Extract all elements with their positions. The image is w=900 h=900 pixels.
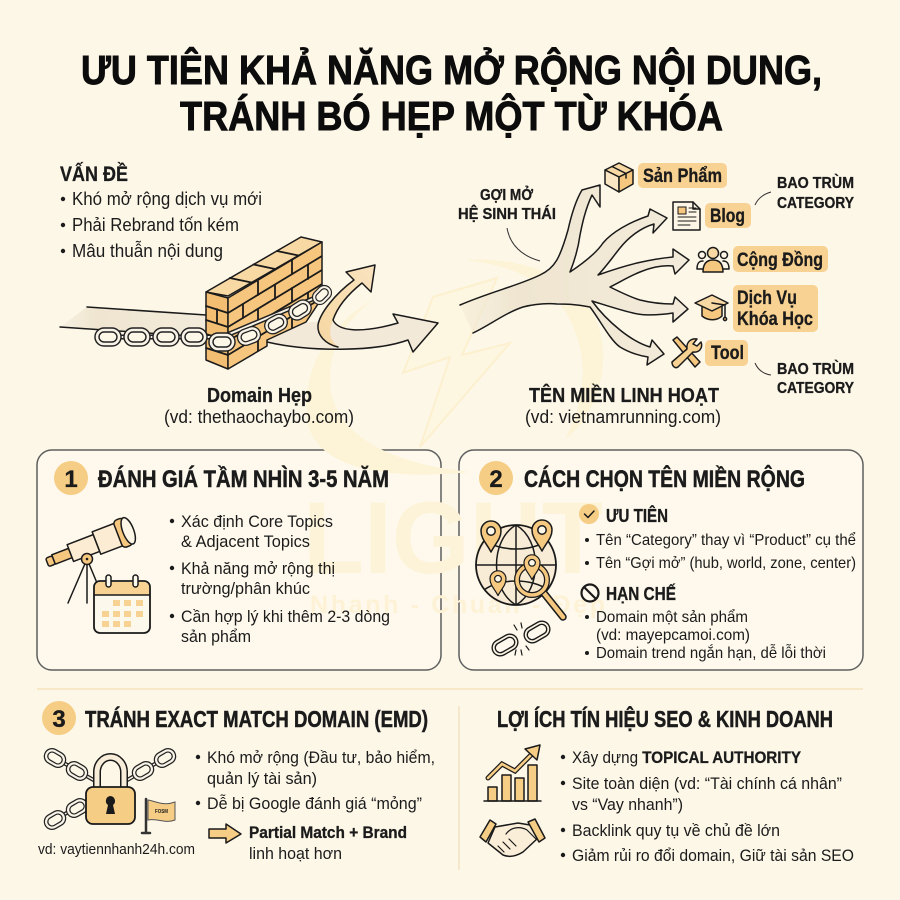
- bullet list: [170, 512, 390, 646]
- swoosh arrow up: [318, 265, 375, 347]
- chain: [97, 285, 332, 349]
- callout: gợi mở hệ sinh thái: GỢI MỞ: [480, 185, 533, 204]
- callout: bao trùm category bottom: BAO TRÙM: [777, 359, 854, 378]
- bullet list: Khả năng mở rộng thị: [181, 559, 335, 578]
- text block: vấn đề: Mâu thuẫn nội dung: [72, 240, 223, 261]
- section: hạn chế: Domain trend ngắn hạn, dễ lỗi thời: [596, 643, 826, 662]
- section: hạn chế: HẠN CHẾ: [606, 583, 676, 604]
- number badge 3: 3: [52, 706, 66, 733]
- bullet list: quản lý tài sản): [207, 769, 317, 788]
- label: tên miền linh hoạt: (vd: vietnamrunning.com): [525, 407, 721, 427]
- heading: cách chọn tên miền rộng: CÁCH CHỌN TÊN MIỀN RỘNG: [524, 465, 805, 493]
- label: dịch vụ khóa học: Dịch Vụ: [737, 288, 797, 309]
- text block: vấn đề: VẤN ĐỀ: [60, 163, 128, 186]
- title: TRÁNH BÓ HẸP MỘT TỪ KHÓA: [180, 93, 723, 139]
- diagram: narrow domain blocked by wall: [60, 237, 438, 369]
- number badge 2: [479, 461, 513, 495]
- label: cộng đồng: Cộng Đồng: [737, 250, 823, 271]
- callout: bao trùm category top: CATEGORY: [777, 195, 854, 212]
- label: domain hẹp: (vd: thethaochaybo.com): [164, 407, 354, 427]
- panel: step 2 frame: [459, 450, 863, 670]
- section: ưu tiên: Tên “Category” thay vì “Product” cụ thể: [596, 531, 856, 549]
- label: dịch vụ khóa học: [733, 285, 818, 332]
- label: tool: [705, 340, 748, 366]
- section: hạn chế: Domain một sản phẩm: [596, 608, 748, 626]
- icon: broken chain: [491, 620, 551, 657]
- icon: chained padlock: [44, 748, 176, 830]
- icon: calendar: [94, 575, 150, 633]
- bullet list: vs “Vay nhanh”): [572, 795, 683, 814]
- bullet list: Backlink quy tụ về chủ đề lớn: [572, 821, 780, 840]
- panel 2 content: [476, 461, 856, 662]
- bullet list: [196, 748, 435, 813]
- section: ưu tiên: [579, 504, 856, 572]
- bullet list: [561, 748, 854, 865]
- number badge 3: [42, 701, 76, 735]
- callout: gợi mở hệ sinh thái: HỆ SINH THÁI: [458, 204, 556, 223]
- watermark logo: LIGHT: [303, 481, 603, 595]
- number badge 1: [54, 461, 88, 495]
- label: domain hẹp: Domain Hẹp: [207, 385, 312, 407]
- label: tên miền linh hoạt: [525, 383, 721, 427]
- icon: globe with pins and magnifier: [476, 520, 563, 617]
- icon: flag: [142, 799, 175, 833]
- title: [81, 47, 822, 139]
- bullet list: Dễ bị Google đánh giá “mỏng”: [207, 794, 422, 813]
- text block: vấn đề: Phải Rebrand tốn kém: [72, 215, 239, 235]
- callout: bao trùm category top: [755, 173, 854, 212]
- bullet list: trường/phân khúc: [181, 579, 310, 598]
- icon: community: [697, 248, 729, 272]
- label: sản phẩm: Sản Phẩm: [643, 166, 722, 187]
- bullet list: Xác định Core Topics: [181, 512, 333, 531]
- brick wall: [206, 237, 322, 369]
- callout: gợi mở hệ sinh thái: [458, 185, 556, 261]
- bullet list: Xây dựng TOPICAL AUTHORITY: [572, 748, 802, 767]
- recommendation text: [249, 823, 407, 863]
- callout: bao trùm category top: BAO TRÙM: [777, 173, 854, 192]
- bullet list: sản phẩm: [181, 627, 251, 646]
- icon: telescope: [42, 515, 139, 603]
- arrow: to partial match: [209, 824, 241, 843]
- heading: tránh emd: TRÁNH EXACT MATCH DOMAIN (EMD): [85, 705, 428, 732]
- panel: step 1 frame: [37, 450, 441, 670]
- caption: example domain: vd: vaytiennhanh24h.com: [38, 841, 195, 858]
- callout: bao trùm category bottom: CATEGORY: [777, 380, 854, 397]
- bullet list: & Adjacent Topics: [181, 532, 310, 551]
- section: ưu tiên: ƯU TIÊN: [606, 505, 668, 526]
- section 3: avoid exact match domain: [38, 701, 435, 863]
- heading: đánh giá tầm nhìn: ĐÁNH GIÁ TẦM NHÌN 3-5 NĂM: [98, 465, 389, 493]
- icon: graduation cap: [695, 295, 728, 321]
- panel 1 content: [42, 461, 390, 646]
- diagram: branching flexible domain: [460, 185, 689, 365]
- watermark logo: Nhanh - Chuẩn - Đẹp: [310, 591, 605, 619]
- ribbon entering wall: [60, 307, 206, 338]
- bullet list: Cần hợp lý khi thêm 2-3 dòng: [181, 607, 390, 626]
- icon: tools: [672, 337, 702, 368]
- icon: document: [673, 202, 700, 230]
- bullet list: Giảm rủi ro đổi domain, Giữ tài sản SEO: [572, 846, 854, 865]
- section: ưu tiên: Tên “Gợi mở” (hub, world, zone, center): [596, 555, 856, 572]
- label: domain hẹp: [164, 385, 354, 427]
- section: seo and business benefits: [480, 705, 854, 865]
- label: tên miền linh hoạt: TÊN MIỀN LINH HOẠT: [529, 383, 719, 407]
- label: blog: Blog: [710, 206, 745, 227]
- number badge 1: 1: [64, 466, 78, 493]
- section: hạn chế: (vd: mayepcamoi.com): [596, 627, 750, 644]
- title: ƯU TIÊN KHẢ NĂNG MỞ RỘNG NỘI DUNG,: [81, 47, 822, 93]
- bullet list: Khó mở rộng (Đầu tư, bảo hiểm,: [207, 748, 435, 767]
- icon: flag: FOSM: [155, 809, 168, 815]
- recommendation text: Partial Match + Brand: [249, 823, 407, 842]
- label: dịch vụ khóa học: Khóa Học: [737, 309, 813, 330]
- watermark logo: [303, 260, 605, 619]
- ribbon after wall with forward arrow: [267, 314, 438, 352]
- bullet list: Site toàn diện (vd: “Tài chính cá nhân”: [572, 774, 842, 793]
- icon: box: [605, 163, 633, 192]
- icon: growth chart: [484, 745, 541, 801]
- callout: bao trùm category bottom: [755, 359, 854, 397]
- text block: vấn đề: [60, 163, 262, 261]
- recommendation text: linh hoạt hơn: [249, 844, 342, 863]
- text block: vấn đề: Khó mở rộng dịch vụ mới: [72, 189, 262, 209]
- section: hạn chế: [582, 583, 826, 662]
- number badge 2: 2: [489, 466, 503, 493]
- icon: handshake: [480, 819, 545, 856]
- label: tool: Tool: [711, 343, 744, 364]
